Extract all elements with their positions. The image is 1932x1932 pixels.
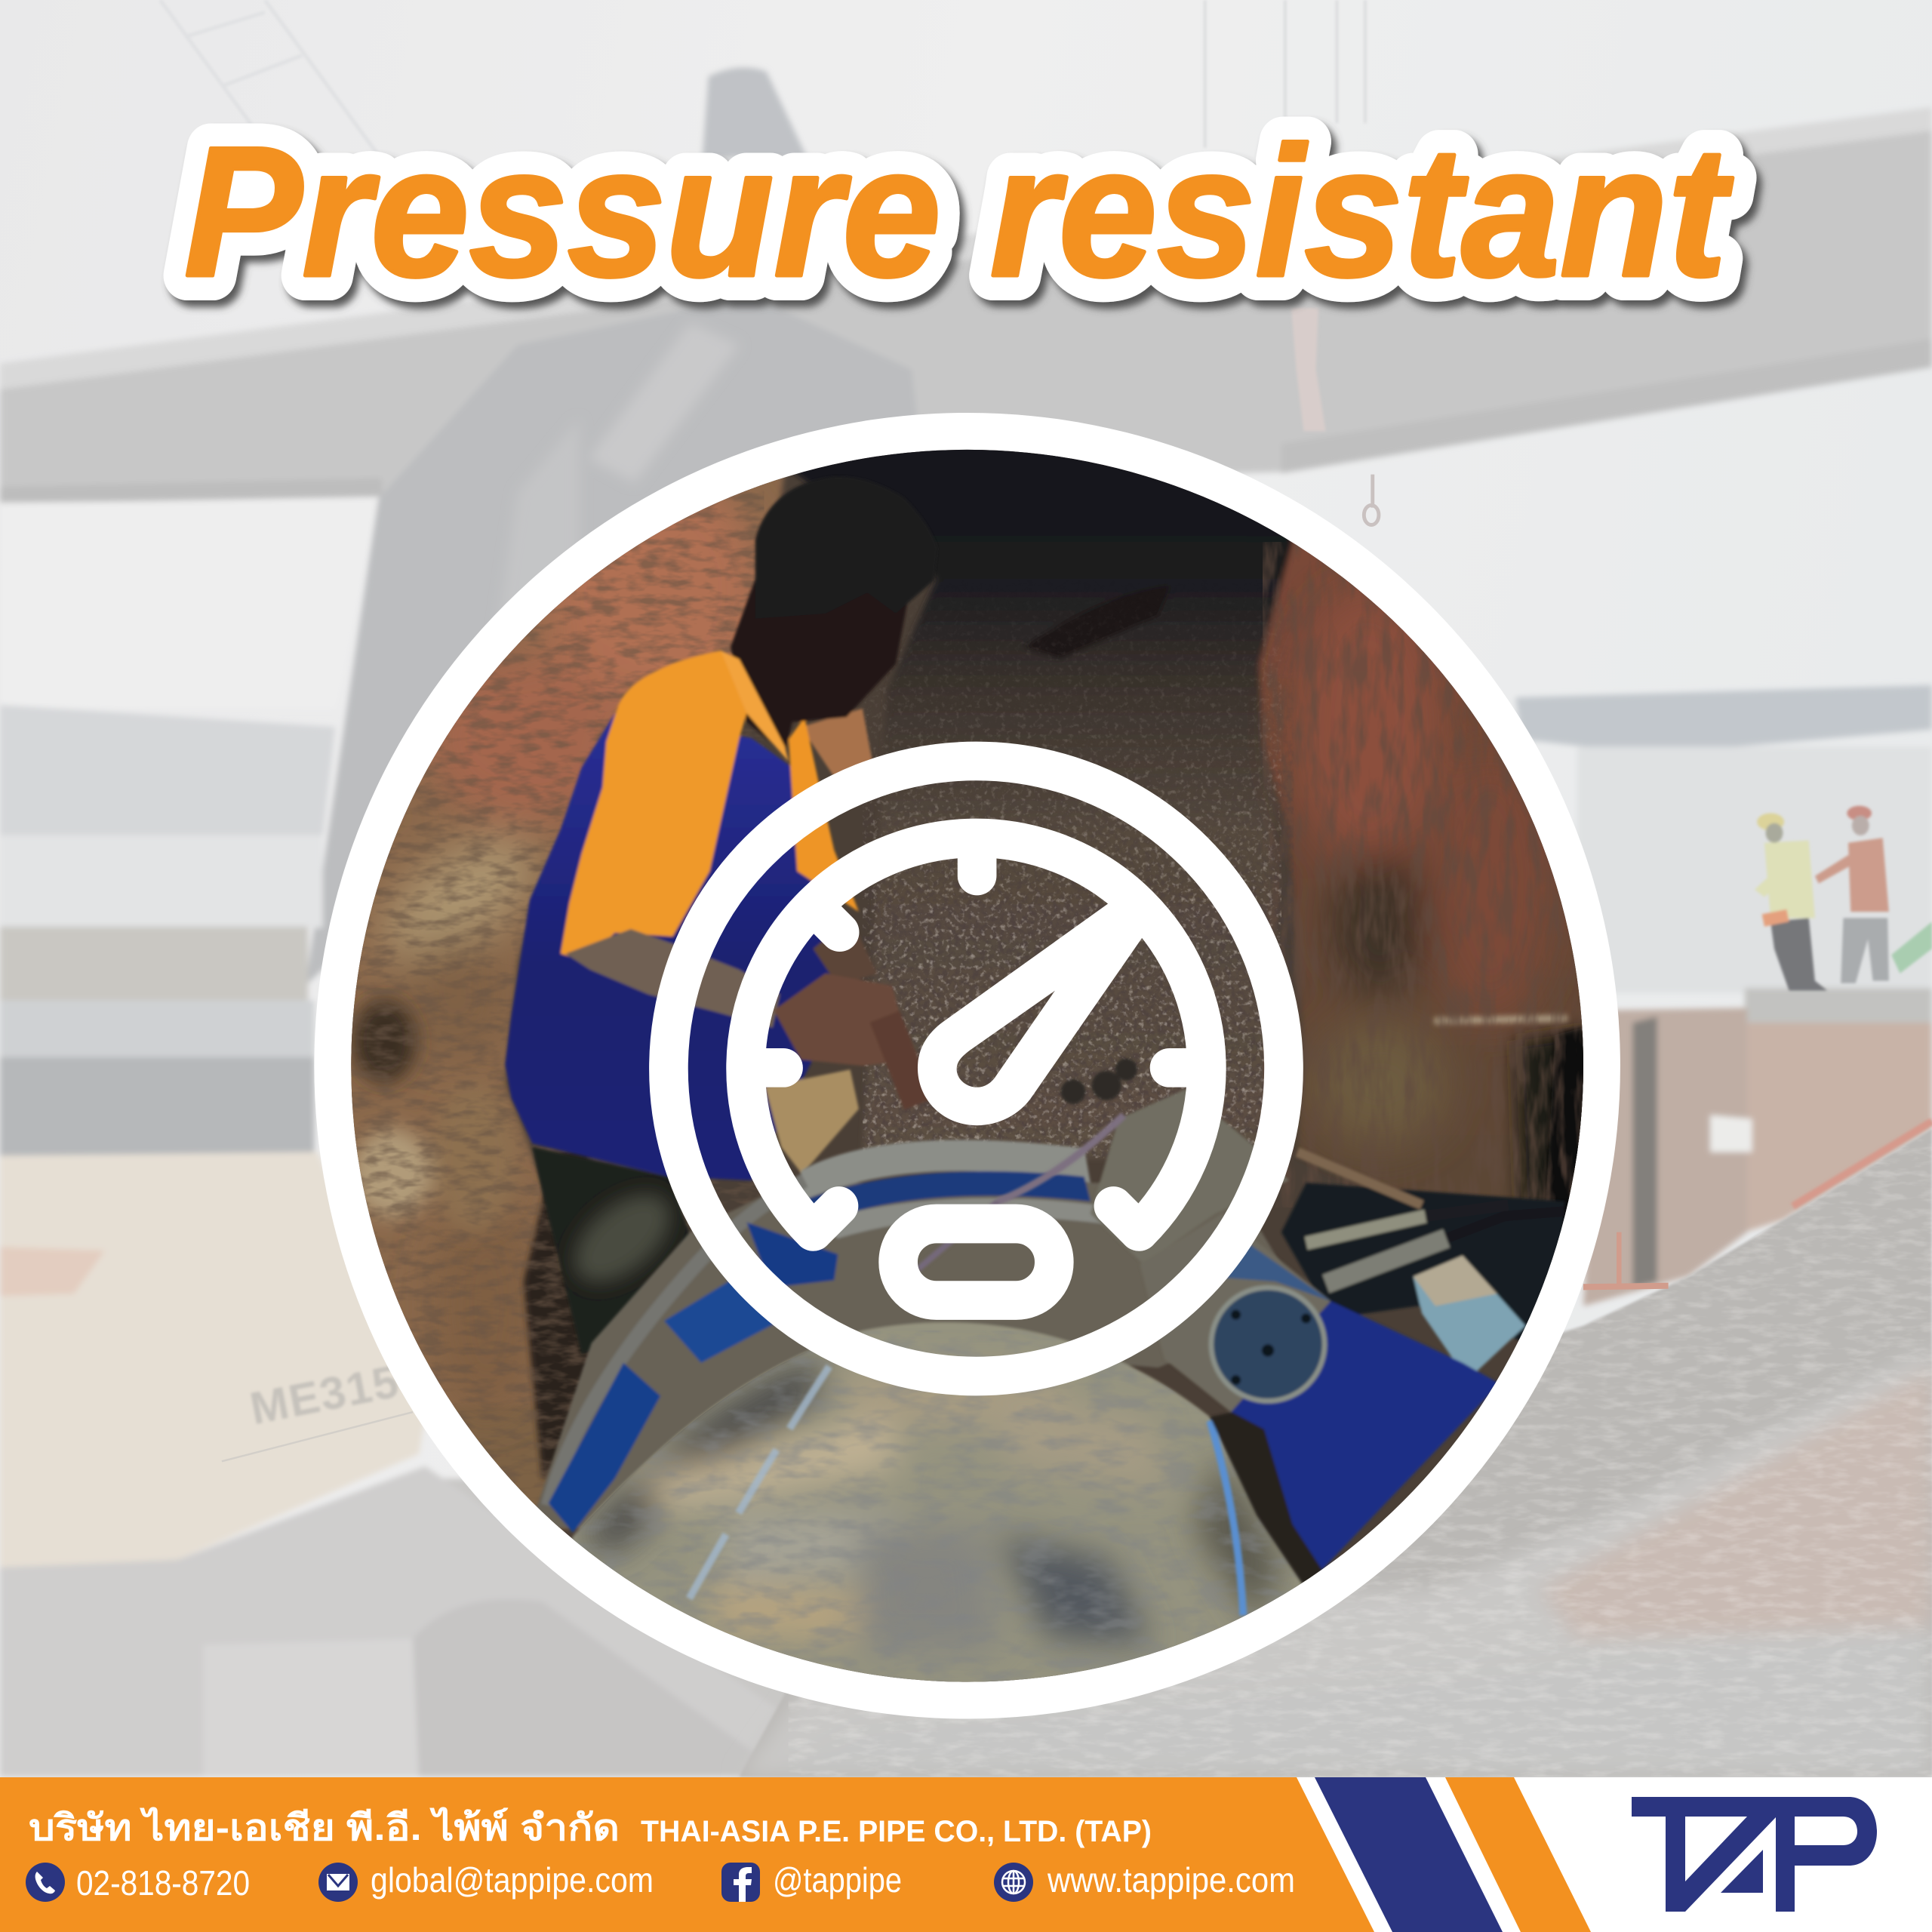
contact: website: www.tappipe.com <box>1047 1860 1295 1900</box>
title: Pressure resistant <box>184 108 1733 315</box>
contact: phone <box>26 1863 250 1903</box>
TAP logo <box>1632 1797 1877 1912</box>
contact: phone: 02-818-8720 <box>76 1863 250 1903</box>
contact: facebook: @tappipe <box>773 1860 902 1900</box>
contact: email: global@tappipe.com <box>371 1860 654 1900</box>
photo circle: white ring and worker in trench <box>314 413 1620 1725</box>
icon: pressure gauge <box>669 761 1284 1377</box>
title: Pressure resistant <box>184 108 1733 315</box>
excavator model text: ME315 <box>246 1355 404 1434</box>
company name in Thai: บริษัท ไทย-เอเชีย พี.อี. ไพ้พ์ จำกัด <box>29 1806 620 1848</box>
footer band <box>0 1777 1932 1932</box>
icon: gauge readout pill <box>898 1223 1054 1300</box>
icon: outer ring <box>669 761 1284 1377</box>
navy stripe <box>1315 1777 1503 1932</box>
company name in English: THAI-ASIA P.E. PIPE CO., LTD. (TAP) <box>641 1815 1152 1848</box>
icon: gauge needle <box>918 899 1145 1125</box>
contact: facebook <box>721 1860 902 1902</box>
icon: gauge dial with ticks <box>746 838 1207 1232</box>
soil speckle <box>345 468 764 1527</box>
orange stripe <box>1445 1777 1591 1932</box>
footer orange panel <box>0 1777 1374 1932</box>
